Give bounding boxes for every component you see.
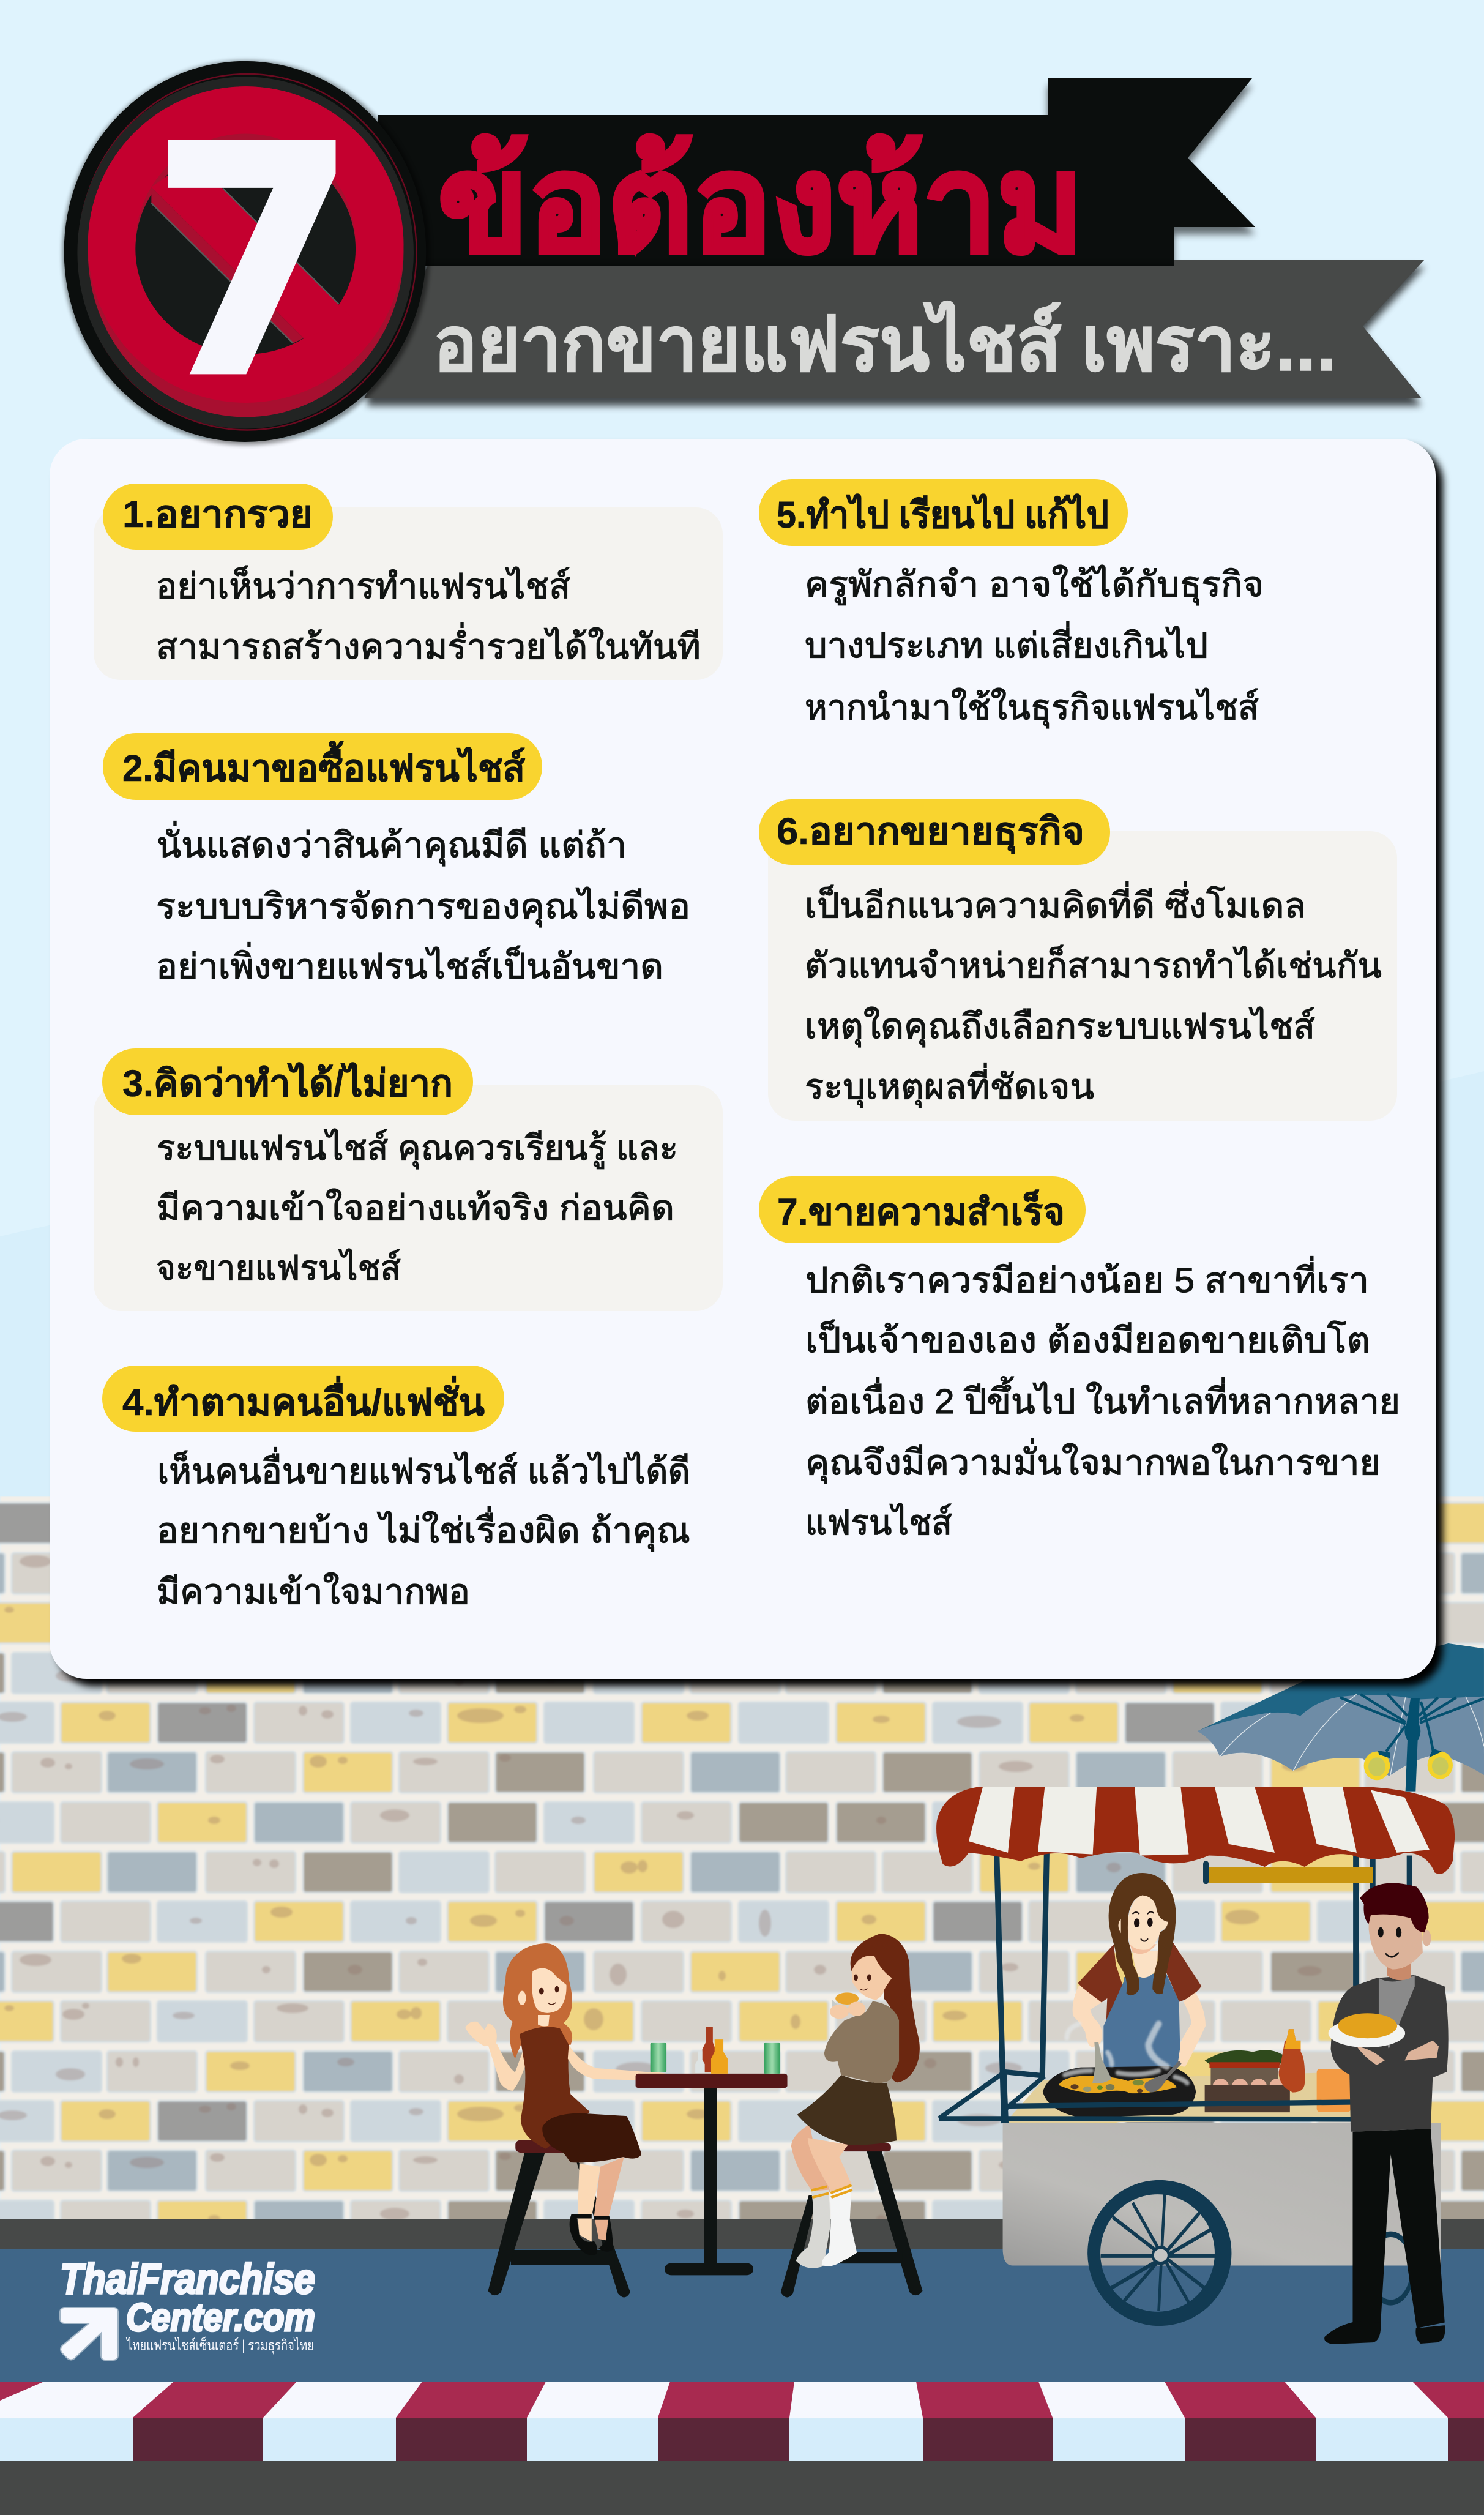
item 7: ขายความสำเร็จ: แฟรนไชส์	[805, 1503, 952, 1542]
brick wall	[0, 1496, 1484, 2241]
item 5: ทำไป เรียนไป แก้ไป: 5.ทำไป เรียนไป แก้ไป	[777, 493, 1109, 536]
curb stripes	[0, 2382, 1484, 2461]
icon: number 7 prohibition sign	[62, 61, 430, 445]
black ribbon	[378, 78, 1255, 266]
item 7: ขายความสำเร็จ: ต่อเนื่อง 2 ปีขึ้นไป ในทำเลที่หลากหลาย	[805, 1377, 1400, 1421]
logo: ThaiFranchise Center.com	[60, 2255, 315, 2360]
item 7: ขายความสำเร็จ: คุณจึงมีความมั่นใจมากพอในการขาย	[805, 1438, 1381, 1484]
food and spatulas in pan	[1059, 2024, 1187, 2093]
cart frame, wheels, awning and man	[936, 1787, 1455, 2344]
item 1: อยากรวย: อย่าเห็นว่าการทำแฟรนไชส์	[156, 565, 570, 606]
logo tagline: ไทยแฟรนไชส์เซ็นเตอร์ | รวมธุรกิจไทย	[125, 2336, 314, 2355]
prohibition slash	[151, 187, 304, 343]
man holding plate	[1324, 1883, 1449, 2344]
ingredients tray and sauce	[1205, 2029, 1351, 2112]
item 3: คิดว่าทำได้/ไม่ยาก: 3.คิดว่าทำได้/ไม่ยาก	[122, 1062, 453, 1104]
stool left	[488, 2140, 630, 2297]
item 4: ทำตามคนอื่น/แฟชั่น	[102, 1366, 690, 1612]
item 5: ทำไป เรียนไป แก้ไป: หากนำมาใช้ในธุรกิจแฟรนไชส์	[805, 687, 1259, 729]
cook woman	[1073, 1873, 1206, 2069]
item 4: ทำตามคนอื่น/แฟชั่น: เห็นคนอื่นขายแฟรนไชส์ แล้วไปได้ดี	[157, 1447, 690, 1491]
woman with long brown hair	[791, 1934, 920, 2268]
item 3: คิดว่าทำได้/ไม่ยาก: จะขายแฟรนไชส์	[156, 1248, 401, 1288]
small wheel	[1367, 2232, 1415, 2306]
item 3: คิดว่าทำได้/ไม่ยาก	[94, 1048, 723, 1311]
item 2: มีคนมาขอซื้อแฟรนไชส์: ระบบบริหารจัดการของคุณไม่ดีพอ	[156, 886, 690, 928]
logo arrow icon	[60, 2308, 118, 2360]
street	[0, 2219, 1484, 2515]
item 2: มีคนมาขอซื้อแฟรนไชส์: อย่าเพิ่งขายแฟรนไชส์เป็นอันขาด	[156, 942, 663, 986]
grey ribbon	[364, 260, 1425, 398]
numeral 7	[168, 140, 336, 374]
item 6: อยากขยายธุรกิจ: เป็นอีกแนวความคิดที่ดี ซึ่งโมเดล	[805, 881, 1306, 925]
stool right	[781, 2143, 923, 2297]
content panel	[50, 439, 1436, 1679]
item 4: ทำตามคนอื่น/แฟชั่น: มีความเข้าใจมากพอ	[157, 1572, 470, 1612]
item 7: ขายความสำเร็จ	[759, 1176, 1400, 1542]
item 2: มีคนมาขอซื้อแฟรนไชส์	[103, 733, 690, 986]
item 5: ทำไป เรียนไป แก้ไป: ครูพักลักจำ อาจใช้ได้กับธุรกิจ	[805, 564, 1264, 606]
logo wordmark: ThaiFranchise	[60, 2255, 315, 2303]
item 1: อยากรวย: 1.อยากรวย	[122, 493, 313, 535]
item 3: คิดว่าทำได้/ไม่ยาก: ระบบแฟรนไชส์ คุณควรเรียนรู้ และ	[157, 1128, 678, 1170]
item 6: อยากขยายธุรกิจ	[759, 799, 1397, 1121]
background sky	[0, 0, 1484, 1500]
item 7: ขายความสำเร็จ: 7.ขายความสำเร็จ	[777, 1190, 1065, 1233]
heading: ข้อต้องห้าม: ข้อต้องห้าม	[438, 129, 1084, 280]
item 7: ขายความสำเร็จ: ปกติเราควรมีอย่างน้อย 5 สาขาที่เรา	[805, 1256, 1369, 1300]
cart counter and body	[1003, 2066, 1441, 2265]
item 5: ทำไป เรียนไป แก้ไป: บางประเภท แต่เสี่ยงเกินไป	[805, 621, 1208, 665]
icon: street umbrella	[1198, 1643, 1484, 1792]
striped awning	[936, 1787, 1455, 1884]
item 4: ทำตามคนอื่น/แฟชั่น: อยากขายบ้าง ไม่ใช่เรื่องผิด ถ้าคุณ	[157, 1506, 690, 1552]
illustration: table and two customers	[465, 1934, 923, 2297]
background hills	[0, 1071, 1484, 1500]
black ribbon shadow	[428, 86, 1255, 273]
logo wordmark second line: Center.com	[126, 2295, 315, 2339]
item 2: มีคนมาขอซื้อแฟรนไชส์: นั่นแสดงว่าสินค้าคุณมีดี แต่ถ้า	[157, 821, 627, 867]
cart wheel	[1087, 2180, 1231, 2326]
table	[636, 2027, 788, 2275]
item 2: มีคนมาขอซื้อแฟรนไชส์: 2.มีคนมาขอซื้อแฟรนไชส์	[122, 741, 526, 789]
heading: อยากขายแฟรนไชส์ เพราะ...: อยากขายแฟรนไชส์ เพราะ...	[433, 301, 1337, 387]
item 1: อยากรวย	[94, 484, 723, 680]
item 7: ขายความสำเร็จ: เป็นเจ้าของเอง ต้องมียอดขายเติบโต	[805, 1319, 1370, 1360]
panel shadow	[57, 446, 1443, 1686]
woman with red hair	[465, 1943, 671, 2255]
item 6: อยากขยายธุรกิจ: ระบุเหตุผลที่ชัดเจน	[805, 1063, 1094, 1108]
item 5: ทำไป เรียนไป แก้ไป	[759, 479, 1264, 729]
item 4: ทำตามคนอื่น/แฟชั่น: 4.ทำตามคนอื่น/แฟชั่น	[122, 1376, 485, 1423]
item 6: อยากขยายธุรกิจ: เหตุใดคุณถึงเลือกระบบแฟรนไชส์	[805, 1006, 1315, 1048]
item 3: คิดว่าทำได้/ไม่ยาก: มีความเข้าใจอย่างแท้จริง ก่อนคิด	[157, 1188, 674, 1228]
cart poles	[997, 1850, 1409, 2123]
grey ribbon shadow	[367, 267, 1425, 406]
item 6: อยากขยายธุรกิจ: ตัวแทนจำหน่ายก็สามารถทำได้เช่นกัน	[805, 944, 1382, 985]
cart rails	[939, 2072, 1352, 2123]
title banner	[364, 78, 1425, 406]
item 6: อยากขยายธุรกิจ: 6.อยากขยายธุรกิจ	[777, 810, 1084, 854]
item 1: อยากรวย: สามารถสร้างความร่ำรวยได้ในทันที	[156, 622, 701, 667]
